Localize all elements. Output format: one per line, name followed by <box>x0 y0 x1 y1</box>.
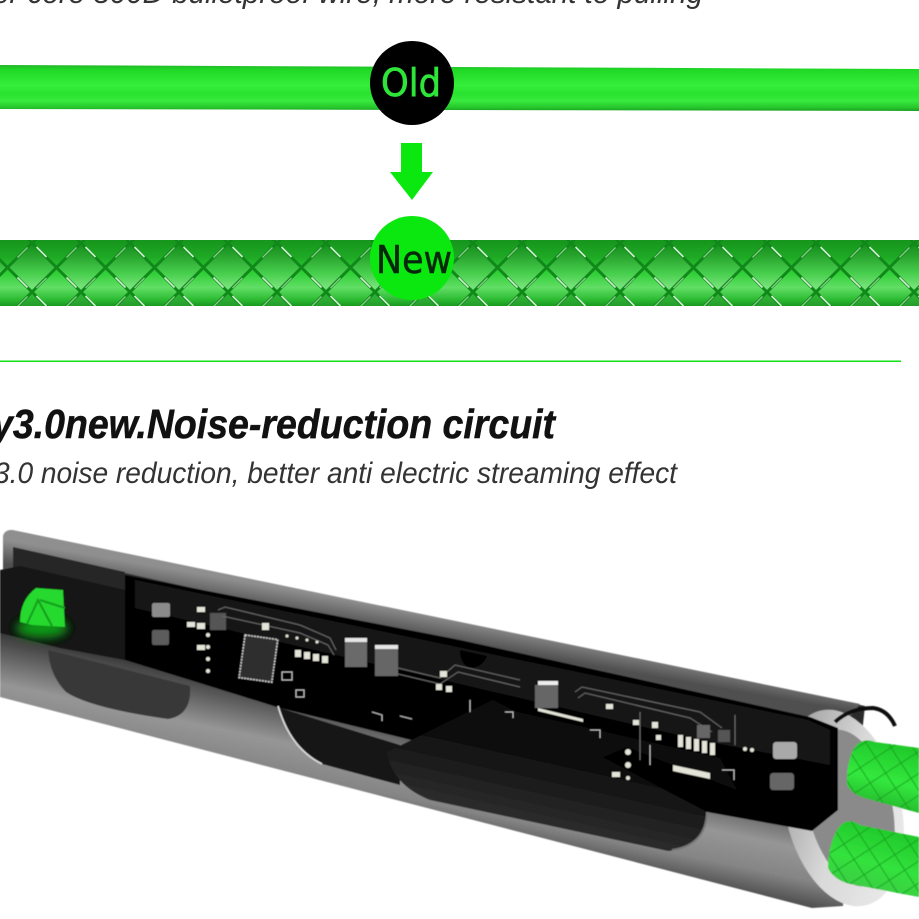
middle button <box>278 706 400 785</box>
small component outlines <box>282 672 734 780</box>
button edge highlight <box>672 812 707 850</box>
large front button <box>387 700 707 851</box>
board section over button <box>500 708 737 790</box>
old label badge: Old <box>381 61 441 105</box>
contact pads <box>152 603 797 790</box>
new label badge: New <box>376 238 452 282</box>
circuit traces <box>218 607 735 760</box>
board upper dark panel <box>135 580 830 765</box>
old smooth green wire <box>0 65 919 111</box>
green cable stub <box>16 588 68 638</box>
surface-mount components <box>187 607 754 780</box>
section subheading: 3.0 noise reduction, better anti electric streaming effect <box>0 457 679 490</box>
board notch <box>460 650 487 668</box>
inner black tube <box>0 566 125 660</box>
section divider line <box>0 360 901 362</box>
section heading: y3.0new.Noise-reduction circuit <box>0 401 557 447</box>
braided cable, upper <box>847 740 919 813</box>
braided cable, lower <box>828 821 919 897</box>
cutaway inline control module <box>0 530 919 918</box>
new label badge <box>370 216 454 300</box>
barrel body <box>0 530 865 908</box>
integrated circuit chips <box>210 613 730 742</box>
dark left compartment <box>13 547 125 660</box>
old label badge <box>370 41 454 125</box>
new braided green wire <box>0 240 919 306</box>
circuit board <box>125 575 838 831</box>
left button <box>48 650 190 719</box>
end cap silver ring <box>764 698 919 918</box>
top metal rim <box>3 530 860 732</box>
arrow: old to new <box>390 143 433 200</box>
